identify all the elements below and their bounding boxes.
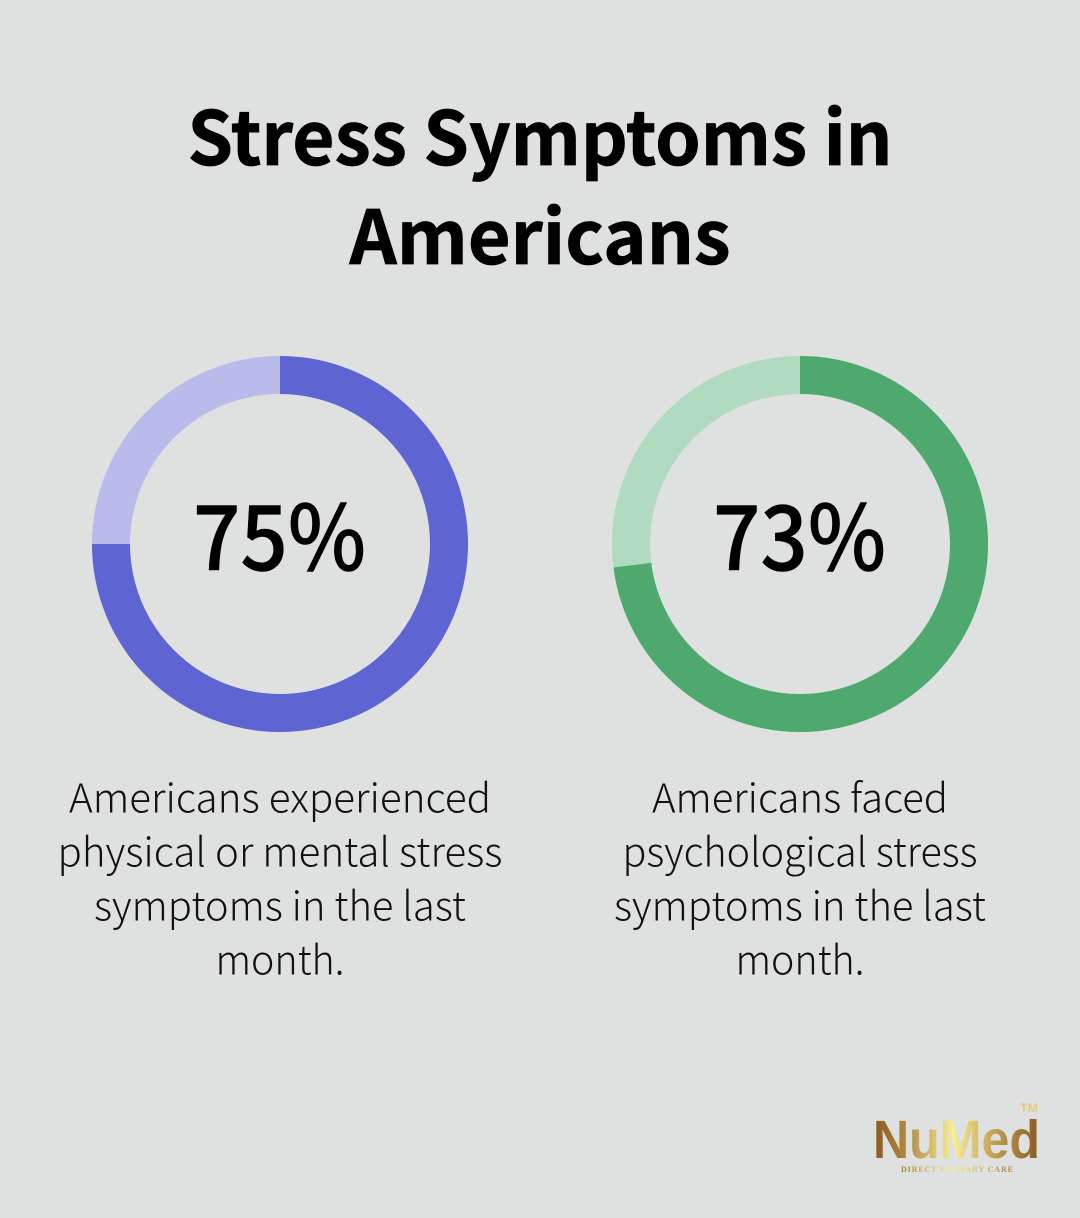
description: 75%: Americans experienced <box>69 766 491 824</box>
donut chart: 73% <box>631 375 969 713</box>
logo: NuMed Direct Primary Care: NuMed <box>873 1110 1040 1170</box>
description: 73%: psychological stress <box>622 820 978 878</box>
title <box>188 80 892 286</box>
description: 75%: physical or mental stress <box>58 820 502 878</box>
logo: NuMed Direct Primary Care: DIRECT PRIMARY CARE <box>901 1165 1013 1174</box>
title: Americans <box>349 179 730 286</box>
panel: 73% psychological stress <box>614 375 986 986</box>
description: 75% <box>58 766 502 986</box>
value: 73%: 73% <box>713 466 886 596</box>
title: Stress Symptoms in <box>188 80 892 187</box>
value: 75%: 75% <box>193 466 366 596</box>
logo: NuMed Direct Primary Care: TM <box>1020 1101 1038 1115</box>
description: 73%: month. <box>736 928 864 986</box>
description: 73% <box>614 766 986 986</box>
description: 73%: Americans faced <box>652 766 948 824</box>
panel: 75% physical or mental stress <box>58 375 502 986</box>
donut chart: 75% <box>111 375 449 713</box>
description: 75%: symptoms in the last <box>94 874 466 932</box>
description: 75%: month. <box>216 928 344 986</box>
description: 73%: symptoms in the last <box>614 874 986 932</box>
